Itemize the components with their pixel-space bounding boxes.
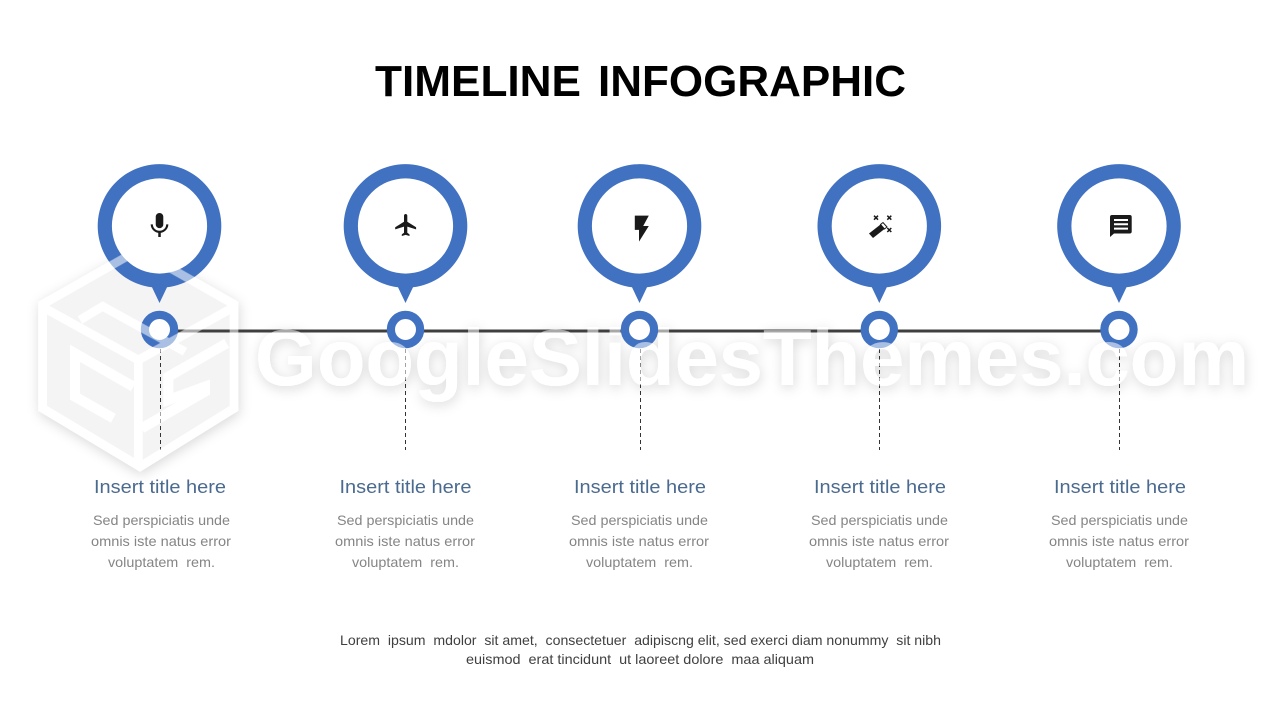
body text 5: Sed perspiciatis unde (1051, 512, 1188, 528)
title: INFOGRAPHIC (598, 57, 906, 106)
body text 2: voluptatem rem. (352, 554, 459, 570)
milestone 3 (569, 164, 709, 570)
body text 3: omnis iste natus error (569, 533, 709, 549)
site name overlay (255, 313, 1249, 402)
body text 1 (91, 512, 231, 570)
body text 2: Sed perspiciatis unde (337, 512, 474, 528)
footer text (340, 632, 941, 667)
body text 5: omnis iste natus error (1049, 533, 1189, 549)
timeline node 3 (625, 315, 654, 344)
title: TIMELINE (375, 57, 581, 106)
body text 5 (1049, 512, 1189, 570)
watermark base: soft shaded cube and name beneath the artwork (43, 250, 1249, 467)
body text 2 (335, 512, 475, 570)
pin 1 (98, 164, 221, 303)
heading 3: Insert title here (574, 476, 706, 497)
body text 1: omnis iste natus error (91, 533, 231, 549)
milestone 4 (809, 164, 949, 570)
heading 4: Insert title here (814, 476, 946, 497)
heading 2: Insert title here (340, 476, 472, 497)
icon: microphone (151, 213, 168, 237)
dashed connector 1 (160, 349, 162, 450)
body text 4 (809, 512, 949, 570)
dashed connector 5 (1118, 349, 1120, 450)
pin 2 (344, 164, 467, 303)
icon: magic wand (869, 216, 891, 238)
pin 3 (578, 164, 701, 303)
body text 3: voluptatem rem. (586, 554, 693, 570)
body text 3: Sed perspiciatis unde (571, 512, 708, 528)
timeline node 4 (865, 315, 894, 344)
body text 1: Sed perspiciatis unde (93, 512, 230, 528)
icon: lightning bolt (635, 216, 649, 242)
milestone 1 (91, 164, 231, 570)
dashed connector 4 (878, 349, 880, 450)
body text 4: Sed perspiciatis unde (811, 512, 948, 528)
icon: chat bubble (1110, 215, 1132, 237)
cube shading (43, 250, 234, 467)
milestone 2 (335, 164, 475, 570)
icon: airplane (395, 214, 416, 236)
timeline node 5 (1104, 315, 1134, 344)
pin 5 (1057, 164, 1181, 303)
footer text: euismod erat tincidunt ut laoreet dolore maa aliquam (466, 651, 814, 667)
footer text: Lorem ipsum mdolor sit amet, consectetuer adipiscng elit, sed exerci diam nonummy sit nibh (340, 632, 941, 648)
pin 4 (818, 164, 941, 303)
watermark overlay: translucent white over the artwork (43, 250, 1249, 467)
body text 5: voluptatem rem. (1066, 554, 1173, 570)
cube overlay (43, 250, 234, 467)
body text 1: voluptatem rem. (108, 554, 215, 570)
body text 4: voluptatem rem. (826, 554, 933, 570)
timeline node 2 (391, 315, 420, 344)
timeline axis line (176, 330, 1102, 332)
dashed connector 3 (640, 349, 642, 450)
body text 4: omnis iste natus error (809, 533, 949, 549)
dashed connector 2 (404, 349, 406, 450)
timeline node 1 (145, 315, 174, 344)
body text 2: omnis iste natus error (335, 533, 475, 549)
body text 3 (569, 512, 709, 570)
title (375, 57, 906, 106)
milestone 5 (1049, 164, 1189, 570)
site name: GoogleSlidesThemes.com (255, 313, 1249, 402)
heading 1: Insert title here (94, 476, 226, 497)
heading 5: Insert title here (1054, 476, 1186, 497)
